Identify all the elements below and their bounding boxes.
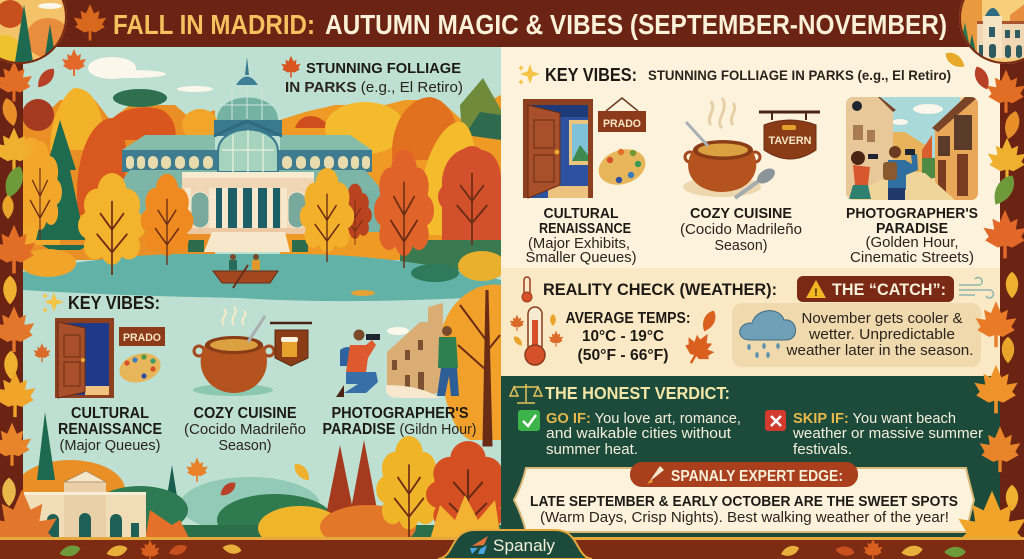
border: left foliage [0,47,57,559]
block: skip if [765,410,983,458]
text: right vibe labels: PARADISE [876,220,948,237]
icon: large thermometer with leaves [510,307,563,365]
text: left vibe labels: Season) [218,437,272,454]
heading: stunning foliage callout: STUNNING FOLLIAGE [306,60,461,77]
Puerta de Alcala [24,471,146,540]
badge: Spanaly logo [438,530,592,559]
text: left vibe labels: PHOTOGRAPHER'S [332,405,468,422]
text: right vibe labels: RENAISSANCE [539,220,631,237]
text: average temps: AVERAGE TEMPS: [566,310,690,327]
block: go if: summer heat. [546,442,638,458]
icon: drifting leaves top right [943,49,993,92]
text: left vibe labels: COZY CUISINE [194,405,296,422]
callout: expert edge: (Warm Days, Crisp Nights). Best walking weather of the year! [540,510,949,526]
heading: left key vibes: KEY VIBES: [68,293,160,313]
footer bar [0,537,1024,559]
text: average temps [566,310,690,364]
large right tree [440,284,501,445]
panel: reality check weather [501,268,1000,376]
bottom landscape [23,412,501,537]
icon: left door and Prado sign [55,318,165,398]
text: left vibe labels: (Major Queues) [60,437,161,454]
text: left vibe labels: (Cocido Madrileño [184,421,306,438]
medallion: left corner forest [0,0,67,64]
icon: Prado sign and palette [594,98,650,191]
medallion: right corner palace [959,0,1024,64]
lake bank bushes [351,251,506,296]
callout: expert edge: SPANALY EXPERT EDGE: [671,468,843,485]
badge: the catch: THE “CATCH”: [832,280,946,299]
icon: rocket [647,466,664,484]
text: november [785,311,974,359]
icon: tavern sign [759,112,820,159]
heading: reality check: REALITY CHECK (WEATHER): [543,280,777,299]
badge: the catch: ! [814,287,818,299]
icon: rain cloud [740,311,796,358]
floating leaves in scene [34,49,313,499]
heading: right key vibes [518,64,951,85]
icon: title maple leaf [74,4,106,41]
heading: left key vibes [42,292,160,313]
text: november: November gets cooler & [802,311,963,327]
text: right vibe labels: Season) [714,238,768,254]
text: left vibe labels: (Gildn Hour) [400,422,476,438]
icon: autumn leaves [678,308,721,371]
heading: right key vibes: STUNNING FOLLIAGE IN PARKS (e.g., El Retiro) [648,67,951,83]
icon: cocido pot with spoon [683,98,778,198]
badge: the catch [797,276,954,302]
icon: scales [510,384,542,403]
border: right foliage [958,47,1024,559]
title: AUTUMN MAGIC & VIBES (SEPTEMBER-NOVEMBER) [325,9,947,40]
text: right vibe labels: Smaller Queues) [526,250,636,266]
callout: expert edge [514,462,974,532]
callout: expert edge: LATE SEPTEMBER & EARLY OCTOBER ARE THE SWEET SPOTS [530,493,958,510]
block: go if [518,410,741,458]
icon: photographers in Madrid street [846,97,978,200]
icon: left photographer and building [336,303,459,398]
icon: small thermometer [522,277,532,302]
text: left vibe labels [58,405,476,454]
heading: honest verdict: THE HONEST VERDICT: [545,383,730,403]
block: skip if: weather or massive summer [792,426,983,442]
icon: wind [959,277,993,298]
lake [23,254,501,301]
foreground trees [18,120,506,277]
icon: Prado sign and palette: PRADO [603,118,641,130]
panel: right cream vibes [501,47,1000,268]
text: average temps: (50°F - 66°F) [578,347,668,364]
text: november: wetter. Unpredictable [808,327,955,343]
text: left vibe labels: CULTURAL [71,405,149,422]
text: left vibe labels: PARADISE [322,421,396,438]
text: average temps: 10°C - 19°C [582,328,664,345]
clouds [88,57,213,92]
text: november: weather later in the season. [785,343,974,359]
rowing boat [213,254,278,288]
header bar [0,0,1024,47]
block: skip if: festivals. [793,442,852,458]
icon: door with painting [523,99,593,198]
Palacio de Cristal [115,57,382,252]
text: right vibe labels: (Cocido Madrileño [680,222,802,238]
icon: left cocido pot with beer sign [193,307,312,396]
block: go if: GO IF: You love art, romance, [546,411,741,427]
text: right vibe labels: (Golden Hour, [866,235,958,251]
heading: stunning foliage callout: IN PARKS (e.g., El Retiro) [285,79,463,96]
text: left vibe labels: RENAISSANCE [58,421,162,438]
panel: left autumn park scene [15,47,510,550]
background tree mass [22,78,501,270]
panel: honest verdict [501,376,1000,540]
heading: right key vibes: KEY VIBES: [545,65,637,85]
text: right vibe labels [526,205,978,266]
text: right vibe labels: PHOTOGRAPHER'S [846,205,978,222]
text: right vibe labels: (Major Exhibits, [528,236,630,252]
icon: left door and Prado sign: PRADO [123,332,161,344]
icon: tavern sign: TAVERN [768,135,812,147]
text: right vibe labels: COZY CUISINE [690,205,792,222]
title [74,4,947,41]
badge: Spanaly logo: Spanaly [493,536,556,555]
title: FALL IN MADRID: [113,9,315,40]
text: right vibe labels: Cinematic Streets) [850,250,974,266]
callout: november weather [732,303,981,367]
text: right vibe labels: CULTURAL [544,205,618,222]
heading: stunning foliage callout [281,56,463,96]
block: go if: and walkable cities without [546,426,731,442]
block: skip if: SKIP IF: You want beach [793,411,956,427]
